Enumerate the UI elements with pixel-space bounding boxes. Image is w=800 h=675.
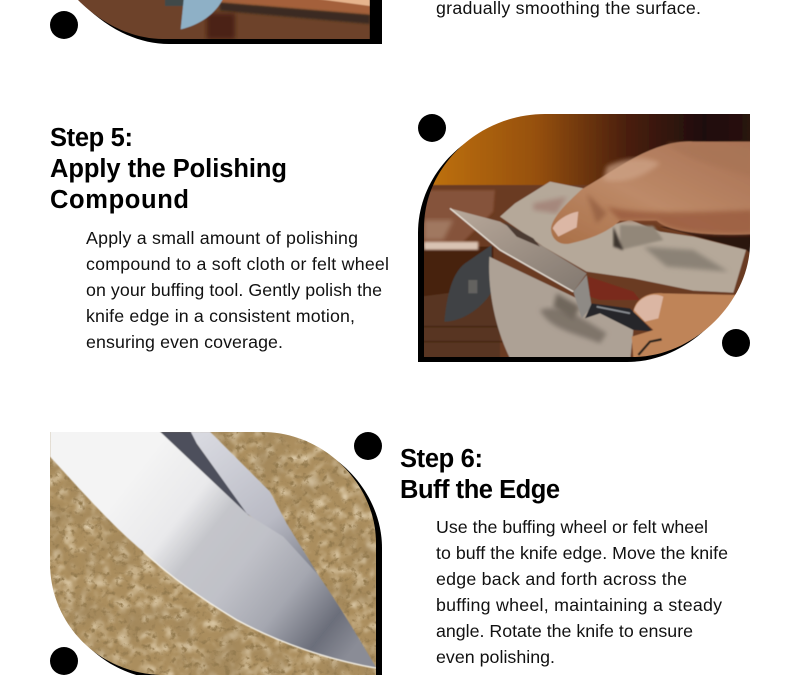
heading: step 6: Buff the Edge: [400, 476, 560, 504]
shadow behind cloth: [661, 226, 750, 253]
icon: knife tip: [181, 0, 224, 29]
panel: step 5 image: [418, 110, 753, 362]
knife handle: [573, 275, 592, 318]
cutting edge: [143, 552, 377, 668]
sand background: [47, 430, 383, 675]
heading: step 5: [50, 124, 287, 214]
dark gap: [158, 432, 250, 517]
main blade: [50, 430, 377, 668]
text block: step 6: buffing wheel, maintaining a steady: [436, 595, 722, 615]
text block: step 6: Use the buffing wheel or felt wheel: [436, 517, 708, 537]
panel: step 6 image: [47, 430, 383, 675]
text block: step 5: Apply a small amount of polishing: [86, 228, 358, 248]
text block: step 5: [86, 228, 389, 352]
heading: step 6: Step 6:: [400, 445, 483, 473]
table: [420, 185, 753, 362]
rear blade facet: [191, 432, 318, 575]
text block: step 5: on your buffing tool. Gently polish the: [86, 280, 382, 300]
icon: step 6 dot top: [354, 432, 382, 460]
sharpening box: [424, 190, 495, 242]
icon: step 5 dot bottom: [722, 329, 750, 357]
icon: step 4 dot: [50, 11, 78, 39]
panel: step 4 image: [78, 0, 382, 44]
polished blade: [450, 208, 587, 292]
heading: step 5: Compound: [50, 186, 189, 214]
heading: step 5: Step 5:: [50, 124, 133, 152]
icon: step 6 dot bottom: [50, 647, 78, 675]
heading: step 5: Apply the Polishing: [50, 155, 287, 183]
lower hand: [632, 293, 737, 358]
text block: step 5: compound to a soft cloth or felt wheel: [86, 254, 389, 274]
upper cloth: [500, 182, 746, 293]
thumbnail: [553, 212, 578, 237]
text block: step 6: even polishing.: [436, 647, 555, 667]
main hand: [551, 141, 753, 244]
lower cloth: [489, 257, 633, 362]
text block: step 6: [436, 517, 728, 667]
text block: step 6: edge back and forth across the: [436, 569, 687, 589]
text block: step 5: knife edge in a consistent motion,: [86, 306, 355, 326]
icon: step 5 dot top: [418, 114, 446, 142]
text block: step 6: to buff the knife edge. Move the knife: [436, 543, 728, 563]
text block: step 5: ensuring even coverage.: [86, 332, 283, 352]
dark knife: [444, 245, 492, 322]
heading: step 6: [400, 445, 560, 504]
background wall: [433, 114, 750, 186]
text block: step 6: angle. Rotate the knife to ensure: [436, 621, 693, 641]
